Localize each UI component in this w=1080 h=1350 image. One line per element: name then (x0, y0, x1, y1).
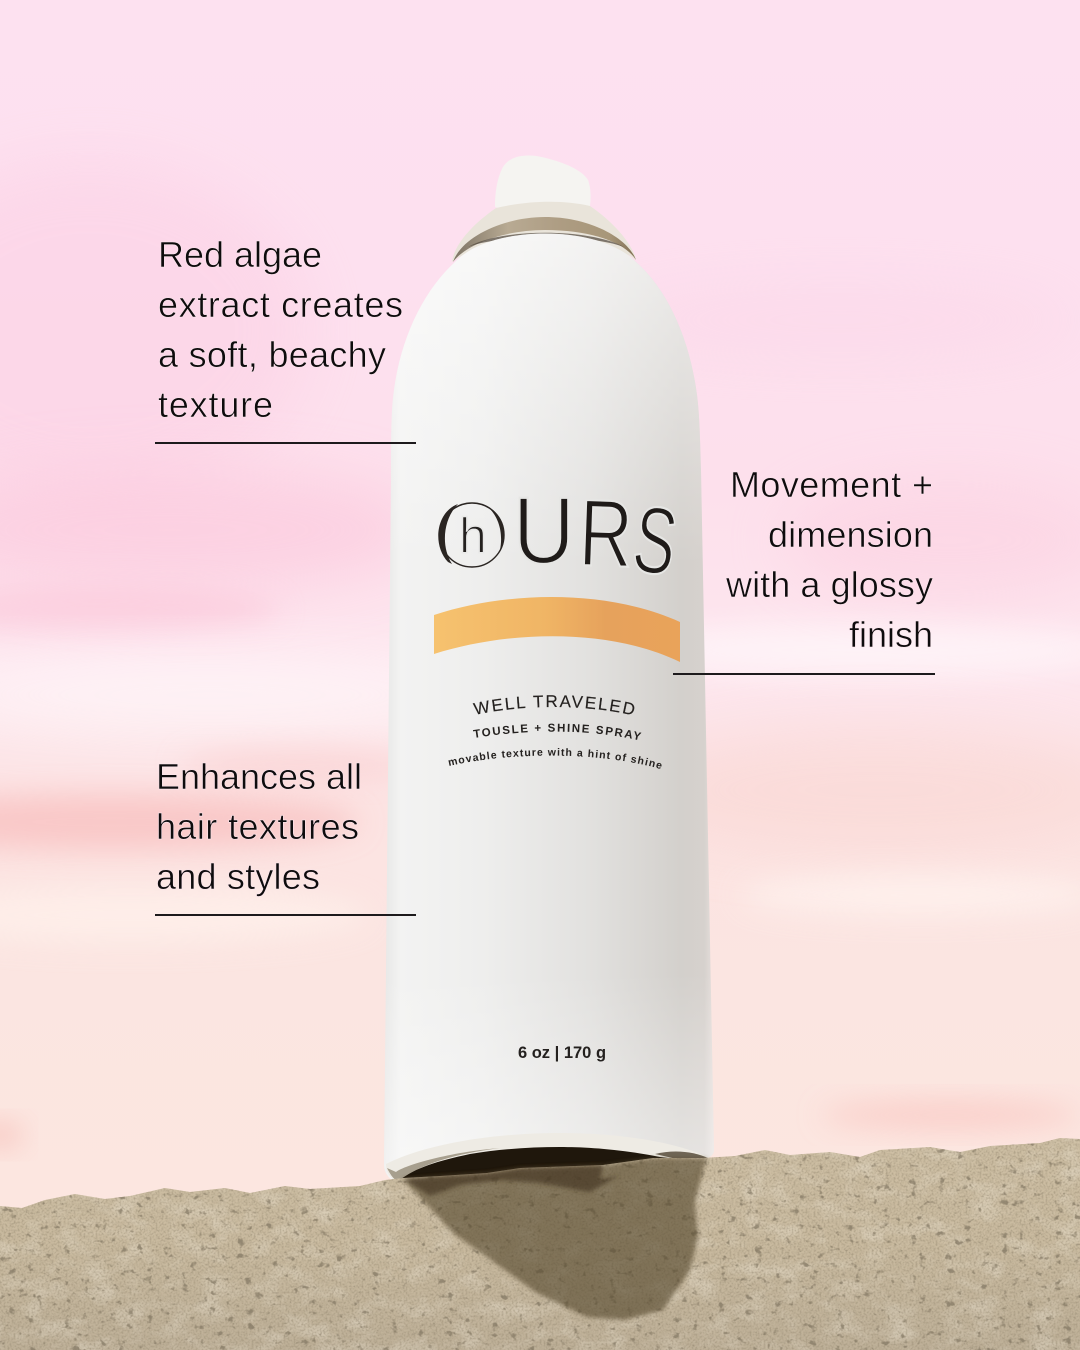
callout: movement and dimension: dimension (768, 514, 933, 555)
callout: all hair textures (155, 756, 416, 916)
logo mark: circled h: h (459, 508, 487, 564)
callout: red algae (155, 234, 416, 444)
callout: red algae: a soft, beachy (158, 334, 386, 375)
callout: movement and dimension: finish (849, 614, 933, 655)
metal collar (452, 202, 636, 262)
orange band (434, 597, 680, 662)
net weight: 6 oz | 170 g (518, 1044, 606, 1062)
callout: all hair textures: hair textures (156, 806, 359, 847)
callout: all hair textures: and styles (156, 856, 320, 897)
callout: movement and dimension (673, 464, 935, 675)
callout: red algae: extract creates (158, 284, 403, 325)
logo (438, 478, 683, 597)
bottle shadow on rock (402, 1158, 707, 1320)
can body (384, 234, 714, 1181)
logo wordmark: U (513, 478, 575, 584)
callout: movement and dimension: with a glossy (725, 564, 933, 605)
logo mark: circled h (438, 503, 504, 567)
product type: TOUSLE + SHINE SPRAY (472, 724, 642, 740)
rock ledge (0, 1138, 1080, 1350)
logo wordmark: S (627, 486, 683, 597)
logo wordmark (513, 478, 683, 597)
product tagline: movable texture with a hint of shine (448, 748, 662, 769)
callout: movement and dimension: Movement + (730, 464, 933, 505)
spray bottle (384, 156, 714, 1179)
callout: all hair textures: Enhances all (156, 756, 362, 797)
nozzle cap (495, 155, 591, 214)
product label (448, 695, 662, 769)
can base rim and opening (386, 1133, 708, 1186)
product name: WELL TRAVELED (472, 695, 634, 714)
callout: red algae: texture (158, 384, 273, 425)
logo wordmark: R (577, 480, 634, 588)
callout: red algae: Red algae (158, 234, 322, 275)
